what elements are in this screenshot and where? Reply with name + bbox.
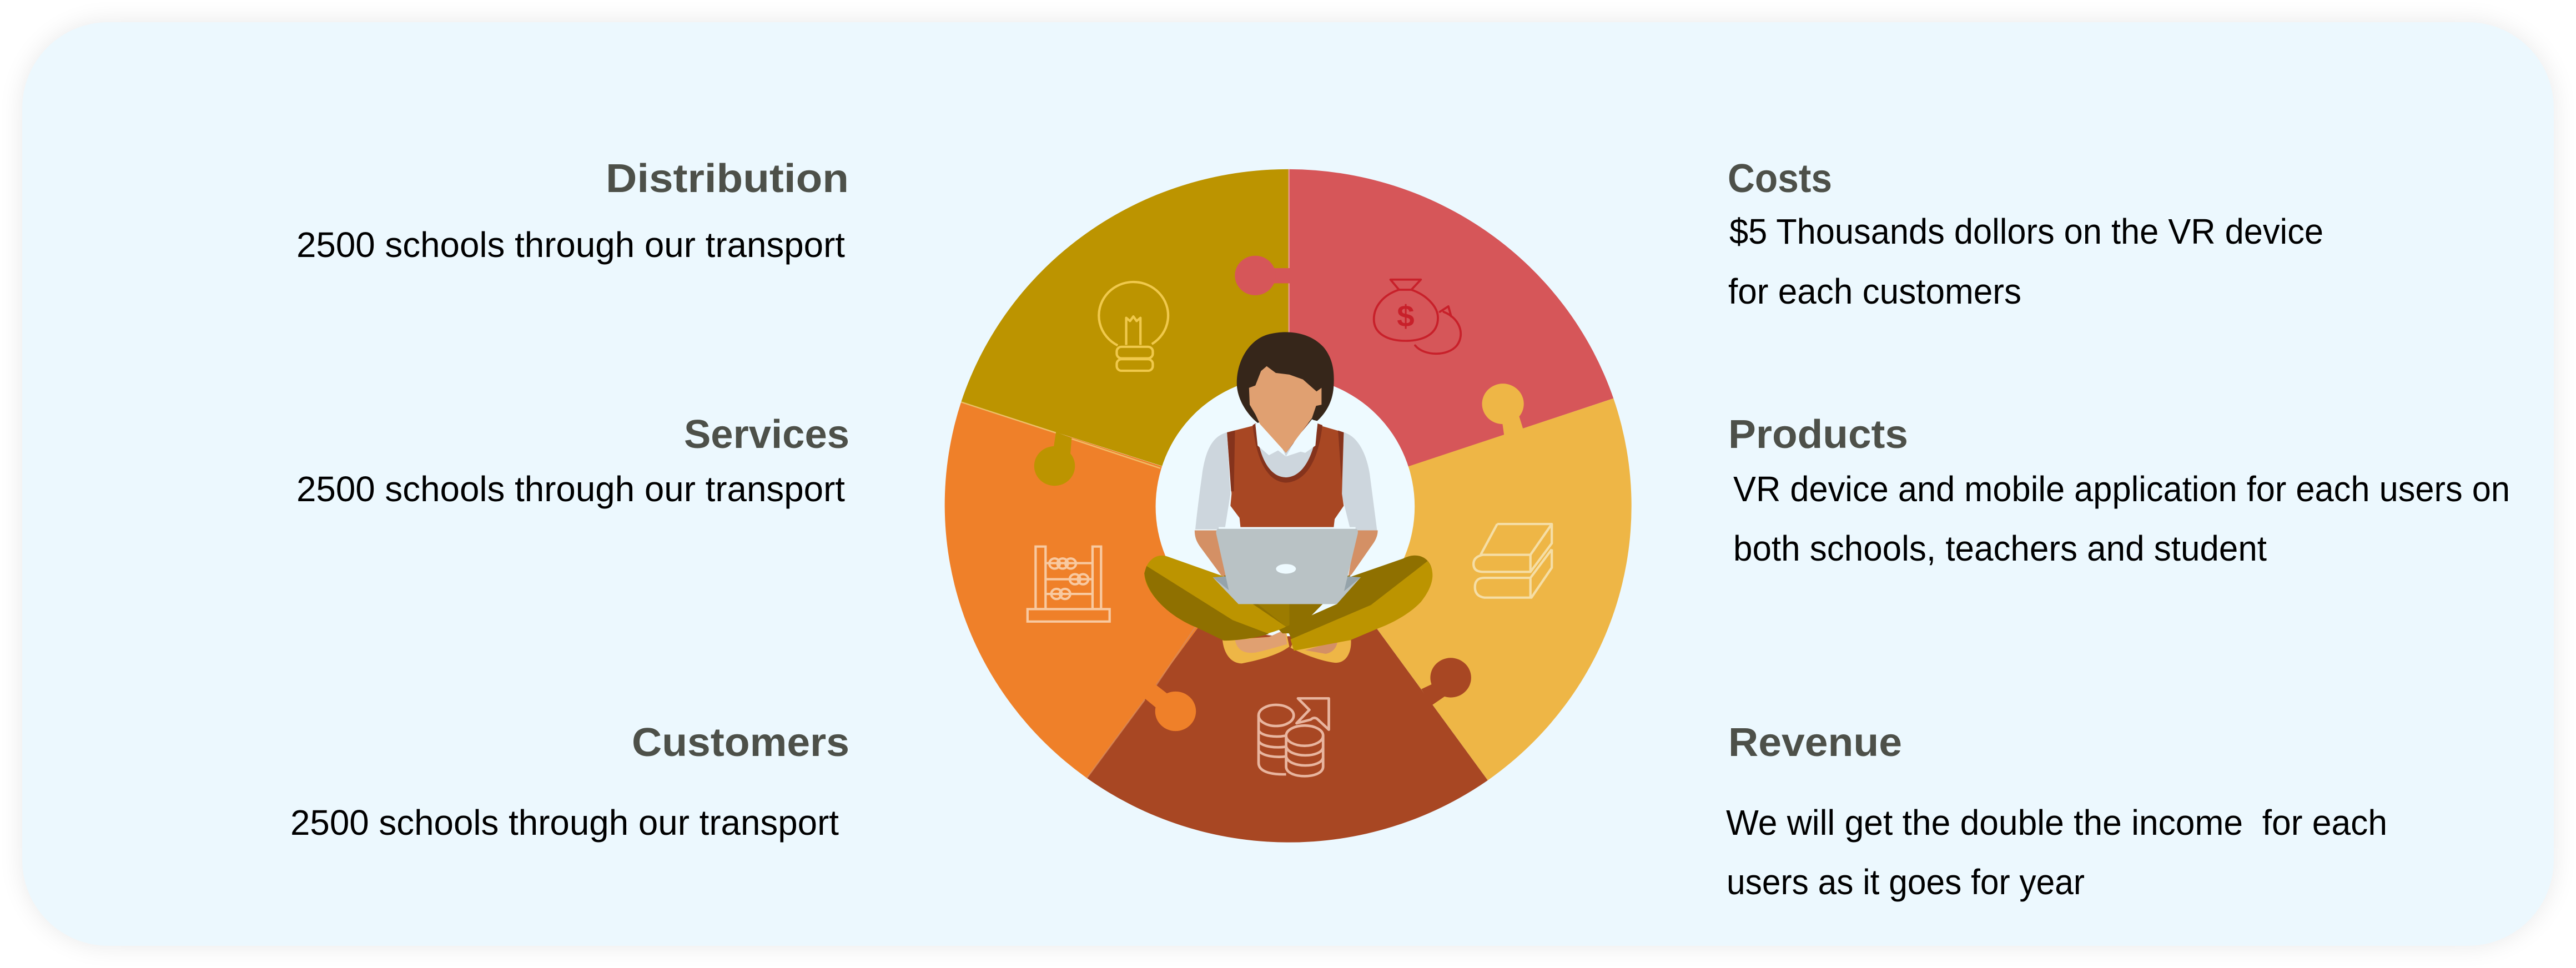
text block: costs: Costs	[1728, 157, 1832, 201]
icon: light bulb	[1099, 282, 1168, 371]
puzzle knob: yellow into red	[1482, 384, 1524, 437]
hair	[1237, 332, 1334, 425]
segment: products (yellow)	[1287, 399, 1632, 780]
seam lines	[961, 169, 1289, 778]
sleeves	[1195, 432, 1377, 531]
text block: services	[296, 412, 849, 509]
text block: products: both schools, teachers and student	[1733, 528, 2267, 568]
text block: revenue: We will get the double the income for each	[1726, 803, 2387, 843]
text block: products	[1728, 412, 2510, 568]
text block: products: VR device and mobile application for each users on	[1733, 469, 2510, 509]
puzzle knob: red into gold	[1235, 256, 1290, 295]
face and neck	[1249, 366, 1321, 453]
puzzle knob: gold into orange	[1034, 432, 1075, 486]
legs	[1144, 556, 1432, 651]
segment: distribution (gold)	[961, 169, 1289, 507]
text block: revenue	[1726, 720, 2387, 902]
text block: distribution: Distribution	[606, 157, 849, 201]
text block: customers	[290, 720, 849, 843]
laptop	[1212, 528, 1361, 604]
forearms	[1195, 531, 1378, 578]
puzzle knob: brown into yellow	[1421, 658, 1471, 705]
text block: revenue: Revenue	[1728, 720, 1902, 765]
text block: costs	[1728, 157, 2323, 311]
text block: customers: Customers	[632, 720, 849, 765]
icon: books	[1473, 524, 1552, 598]
puzzle wheel	[945, 169, 1632, 843]
puzzle knob: orange into brown	[1145, 684, 1196, 731]
icon glyph: dollar: $	[1397, 299, 1415, 333]
text block: products: Products	[1728, 412, 1908, 457]
text block: services: 2500 schools through our transport	[296, 469, 845, 509]
shirt and collar	[1255, 419, 1317, 477]
segment: services (orange)	[945, 402, 1287, 778]
illustration: person with laptop	[1144, 332, 1432, 663]
vest	[1227, 424, 1344, 528]
text block: distribution	[296, 157, 849, 265]
icon: abacus	[1028, 547, 1110, 622]
text block: revenue: users as it goes for year	[1727, 862, 2085, 902]
text block: customers: 2500 schools through our transport	[290, 803, 839, 843]
icon: coins and growth arrow	[1259, 698, 1329, 776]
center circle	[1156, 377, 1415, 636]
segment: costs (red)	[1289, 169, 1613, 507]
text block: costs: $5 Thousands dollors on the VR device	[1729, 211, 2323, 251]
segment: revenue (brown)	[1087, 507, 1488, 843]
left foot	[1222, 630, 1289, 663]
text block: costs: for each customers	[1728, 271, 2021, 311]
right foot	[1290, 638, 1351, 663]
icon: money bag	[1374, 280, 1461, 354]
text block: distribution: 2500 schools through our transport	[296, 225, 845, 265]
text block: services: Services	[684, 412, 849, 457]
